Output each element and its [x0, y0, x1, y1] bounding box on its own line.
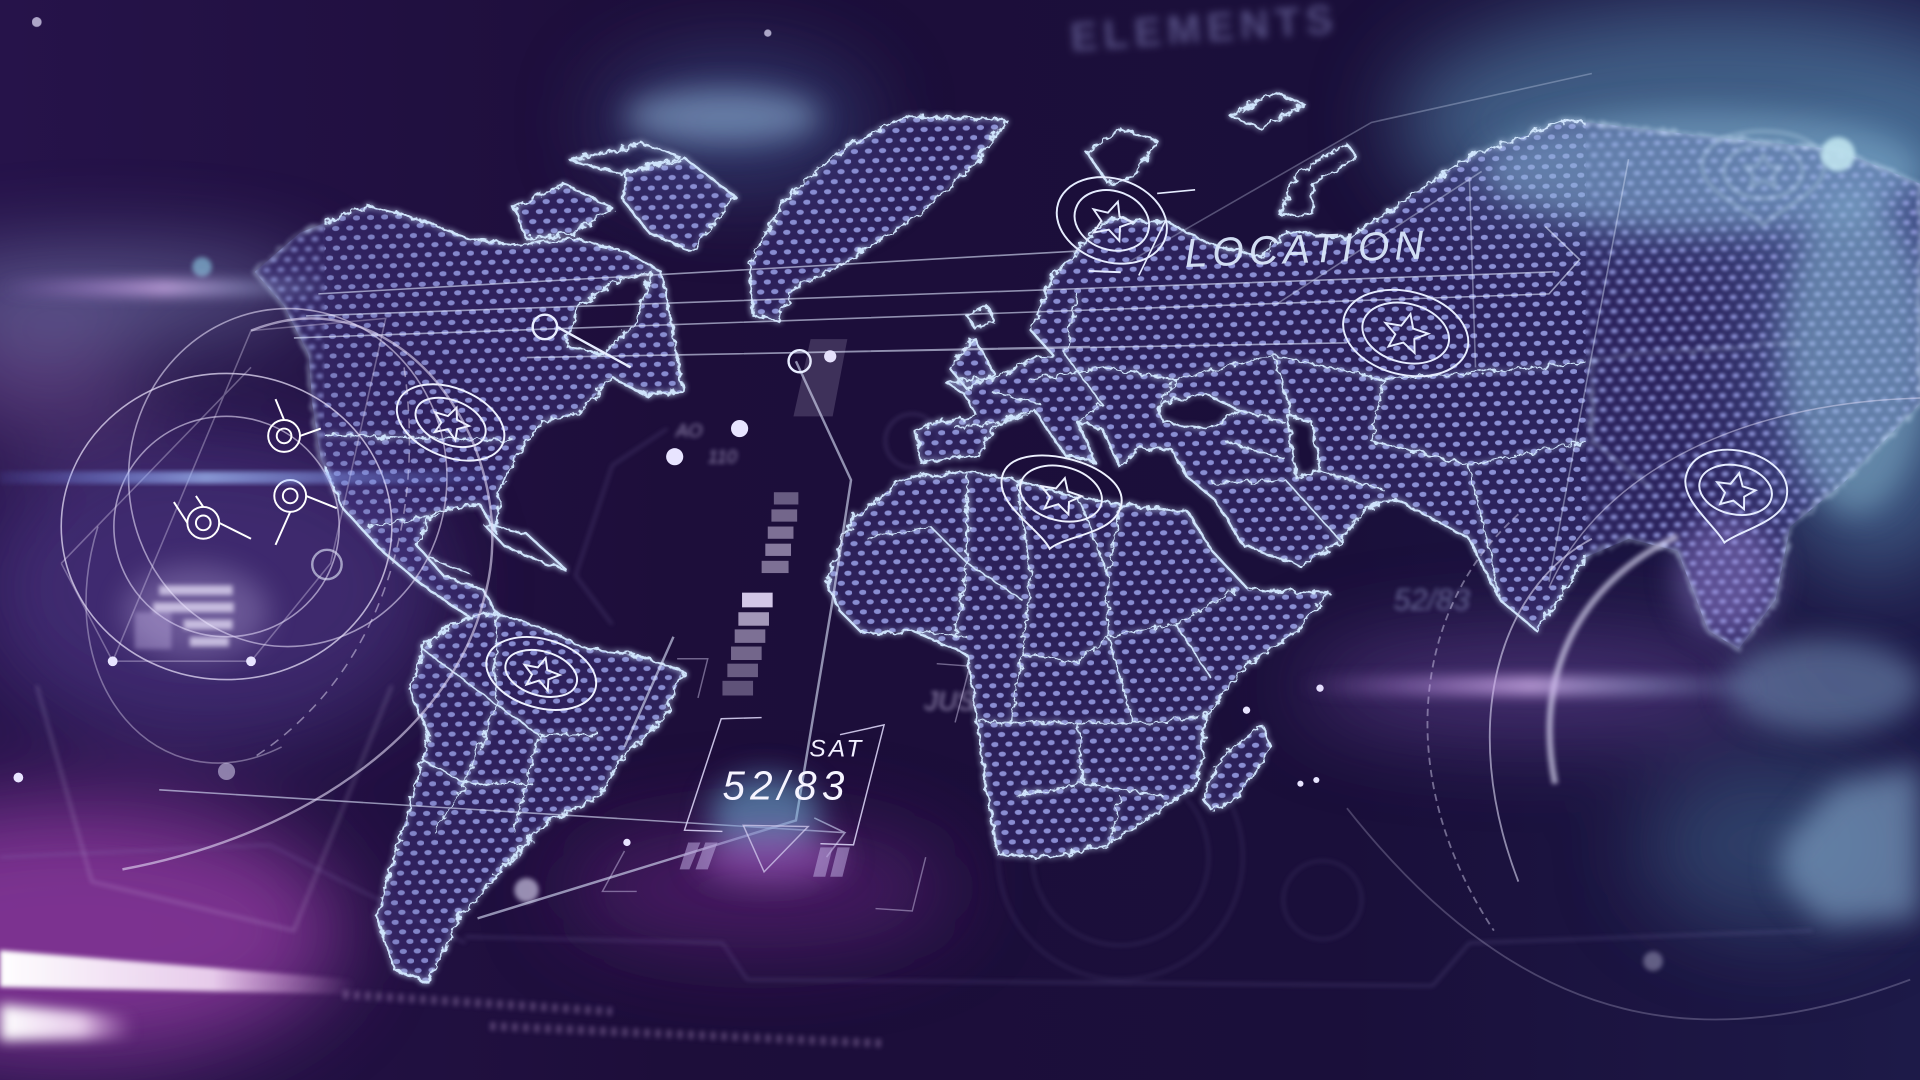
blurred right 52/83 label: 52/83 [1393, 583, 1470, 617]
readout glow [698, 775, 845, 884]
streak: bottom left lower [0, 1004, 135, 1041]
map: out-of-focus dots [255, 122, 1920, 644]
map coastlines and borders [255, 92, 1920, 982]
pin: North America [386, 370, 516, 475]
level meter bars [722, 339, 847, 696]
node dots [13, 17, 1663, 971]
world map landmasses [255, 116, 1920, 981]
pin: Russia [1334, 277, 1478, 389]
LOCATION label: LOCATION [1184, 222, 1425, 276]
streak: left blue flare [0, 471, 514, 484]
pin connector [1139, 190, 1195, 276]
streak: bottom dashes [343, 994, 882, 1043]
HUD horizontal scan lines [159, 73, 1629, 918]
marker: rings over North America [312, 315, 811, 579]
light streaks [0, 279, 1763, 1043]
radar glow patch [122, 566, 269, 659]
marker: glowing dot [1821, 137, 1855, 171]
map: sharp dots [324, 117, 1586, 981]
readout frame [602, 659, 970, 911]
right HUD arcs [1347, 398, 1920, 1020]
readout value: SAT: SAT [809, 736, 864, 763]
streak: right purple flare [1298, 676, 1763, 696]
radar target nodes [174, 399, 337, 545]
readout tick bars [680, 842, 850, 877]
map: land tint [256, 116, 1920, 980]
HUD background lines [0, 414, 1812, 986]
pin: South America [478, 625, 605, 722]
radar small bars [135, 585, 234, 649]
radar rings [37, 309, 492, 931]
radar HUD on left [37, 309, 492, 931]
small blurred labels: AO [675, 420, 702, 441]
streak: bottom left bright [0, 950, 355, 994]
pin: blurred far east [1702, 131, 1824, 225]
pin: South East Asia [1674, 441, 1794, 553]
pin: North Africa [988, 444, 1129, 563]
streak: left haze [0, 279, 331, 296]
in-focus outlines [324, 88, 1586, 988]
out-of-focus outlines [250, 118, 1920, 654]
small blurred labels [675, 420, 975, 716]
small blurred labels: 110 [708, 446, 738, 467]
readout value: 52/83: 52/83 [722, 763, 847, 809]
small blurred labels: JUS [923, 686, 975, 716]
pin: Scandinavia [1041, 163, 1178, 290]
right side blurred map haze [624, 89, 1920, 924]
